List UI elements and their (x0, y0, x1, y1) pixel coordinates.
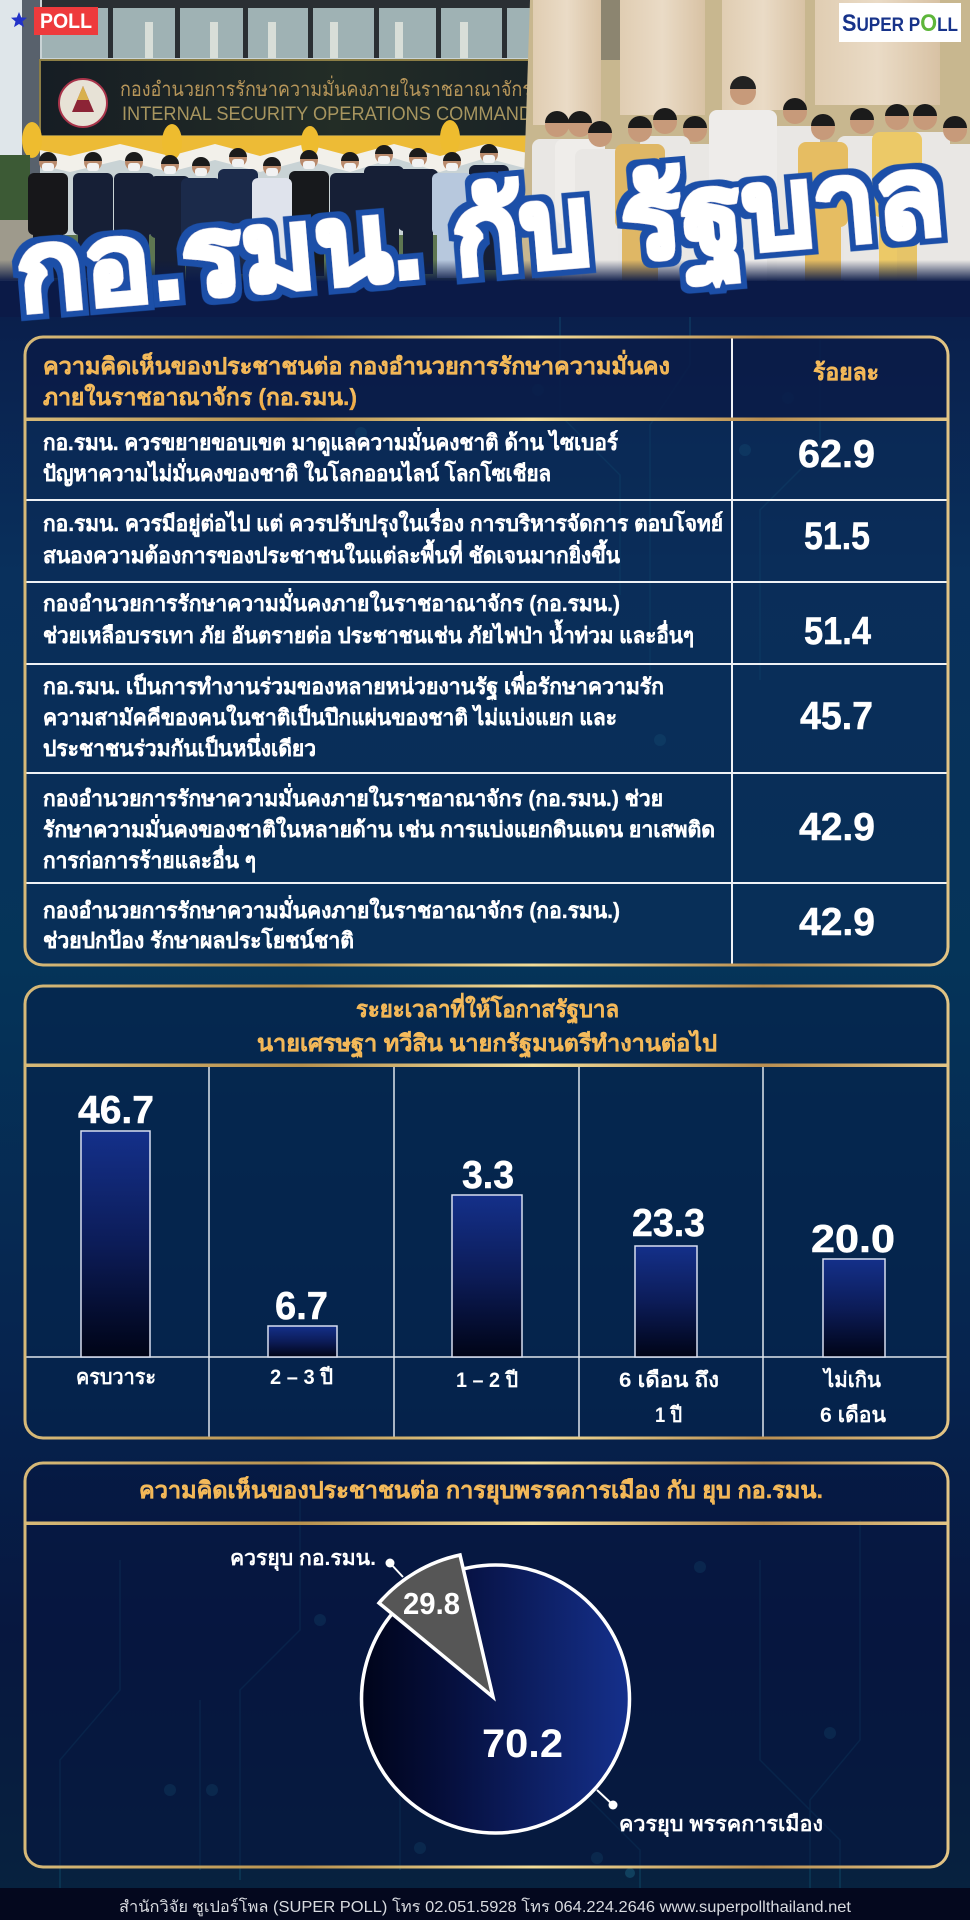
bar: under 6 months: 6 เดือน (820, 1403, 887, 1427)
chart heading: นายเศรษฐา ทวีสิน นายกรัฐมนตรีทำงานต่อไป (257, 1029, 717, 1058)
pie slice: dissolve ISOC (379, 1555, 493, 1697)
chart heading (257, 992, 717, 1058)
value 29.8: 29.8 (403, 1586, 460, 1621)
row 3: กองอำนวยการรักษาความมั่นคงภายในราชอาณาจักร (กอ.รมน.) (43, 587, 620, 616)
panel: opinion table (25, 337, 948, 965)
bar: 6 months to 1 year: 1 ปี (655, 1403, 682, 1427)
photo: ISOC building and officers (0, 0, 540, 300)
row 5: รักษาความมั่นคงของชาติในหลายด้าน เช่น การแบ่งแยกดินแดน ยาเสพติด (43, 813, 715, 842)
row 3 (43, 587, 871, 653)
footer: สำนักวิจัย ซูเปอร์โพล (SUPER POLL) โทร 02.051.5928 โทร 064.224.2646 www.superpollthailand.net (119, 1897, 852, 1917)
row 2: สนองความต้องการของประชาชนในแต่ละพื้นที่ ชัดเจนมากยิ่งขึ้น (43, 539, 620, 568)
logo: super poll: SUPER POLL (842, 10, 958, 37)
bar: under 6 months: 20.0 (811, 1218, 895, 1261)
row 6 (43, 894, 875, 953)
bar: full term (76, 1089, 156, 1389)
pie slice: dissolve parties (362, 1565, 630, 1833)
bunting (40, 136, 532, 172)
chart heading: ระยะเวลาที่ให้โอกาสรัฐบาล (356, 992, 619, 1024)
row 1: ปัญหาความไม่มั่นคงของชาติ ในโลกออนไลน์ โลกโซเชียล (43, 457, 551, 487)
bar: 6 months to 1 year: 6 เดือน ถึง (619, 1368, 719, 1392)
title: กอ.รมน. กับ รัฐบาล (12, 133, 950, 346)
row 3: 51.4 (804, 610, 871, 653)
row 2 (43, 507, 870, 568)
bar: full term: ครบวาระ (76, 1366, 156, 1389)
photo fade (0, 260, 970, 317)
bar: 6 months to 1 year: 23.3 (632, 1202, 705, 1245)
label: dissolve ISOC: ควรยุบ กอ.รมน. (230, 1547, 376, 1572)
row 5: การก่อการร้ายและอื่น ๆ (43, 844, 256, 873)
row 4: ความสามัคคีของคนในชาติเป็นปึกแผ่นของชาติ ไม่แบ่งแยก และ (43, 703, 617, 730)
table heading: ความคิดเห็นของประชาชนต่อ กองอำนวยการรักษาความมั่นคง (43, 349, 670, 379)
sign board (40, 60, 532, 136)
row 5: กองอำนวยการรักษาความมั่นคงภายในราชอาณาจักร (กอ.รมน.) ช่วย (43, 782, 663, 811)
pie heading: ความคิดเห็นของประชาชนต่อ การยุบพรรคการเมือง กับ ยุบ กอ.รมน. (139, 1475, 823, 1505)
panel: pie chart (25, 1463, 948, 1867)
bar: 1-2 years: 1 – 2 ปี (456, 1368, 518, 1392)
bar: under 6 months (811, 1218, 895, 1427)
label: dissolve ISOC (230, 1547, 403, 1577)
footer (0, 1888, 970, 1920)
label: dissolve parties: ควรยุบ พรรคการเมือง (619, 1812, 823, 1838)
table heading (43, 349, 670, 410)
row 4 (43, 670, 873, 761)
row 4: กอ.รมน. เป็นการทำงานร่วมของหลายหน่วยงานรัฐ เพื่อรักษาความรัก (43, 670, 664, 701)
value 70.2: 70.2 (482, 1722, 563, 1766)
row 2: กอ.รมน. ควรมีอยู่ต่อไป แต่ ควรปรับปรุงในเรื่อง การบริหารจัดการ ตอบโจทย์ (43, 507, 723, 538)
row 4: ประชาชนร่วมกันเป็นหนึ่งเดียว (43, 732, 316, 761)
bar: full term: 46.7 (78, 1089, 154, 1132)
bar: 6 months to 1 year (619, 1202, 719, 1427)
row 6: กองอำนวยการรักษาความมั่นคงภายในราชอาณาจักร (กอ.รมน.) (43, 894, 620, 923)
row 1 (43, 426, 875, 487)
row 4: 45.7 (800, 695, 873, 738)
bar: under 6 months: ไม่เกิน (822, 1367, 882, 1392)
panel: bar chart (25, 986, 948, 1438)
bar: 1-2 years: 3.3 (462, 1154, 514, 1197)
sign board: กองอำนวยการรักษาความมั่นคงภายในราชอาณาจักร (120, 75, 532, 101)
row 1: 62.9 (798, 433, 875, 476)
bar: 2-3 years: 2 – 3 ปี (270, 1365, 333, 1389)
row 5 (43, 782, 875, 873)
label: dissolve parties (597, 1790, 823, 1838)
bar: 1-2 years (452, 1154, 522, 1392)
row 6: ช่วยปกป้อง รักษาผลประโยชน์ชาติ (43, 927, 354, 953)
row 5: 42.9 (799, 806, 875, 849)
bar: 2-3 years: 6.7 (275, 1285, 328, 1328)
row 3: ช่วยเหลือบรรเทา ภัย อันตรายต่อ ประชาชนเช่น ภัยไฟป่า น้ำท่วม และอื่นๆ (43, 619, 694, 648)
column heading: ร้อยละ (813, 359, 879, 385)
row 2: 51.5 (804, 515, 870, 558)
badge: poll (11, 7, 98, 35)
photo: government cabinet (520, 0, 970, 310)
badge: poll: POLL (40, 10, 92, 33)
row 6: 42.9 (799, 901, 875, 944)
table heading: ภายในราชอาณาจักร (กอ.รมน.) (43, 383, 357, 410)
row 1: กอ.รมน. ควรขยายขอบเขต มาดูแลความมั่นคงชาติ ด้าน ไซเบอร์ (43, 426, 618, 457)
logo: super poll (839, 3, 961, 42)
bar: 2-3 years (268, 1285, 337, 1389)
sign board: INTERNAL SECURITY OPERATIONS COMMAND (122, 104, 532, 125)
